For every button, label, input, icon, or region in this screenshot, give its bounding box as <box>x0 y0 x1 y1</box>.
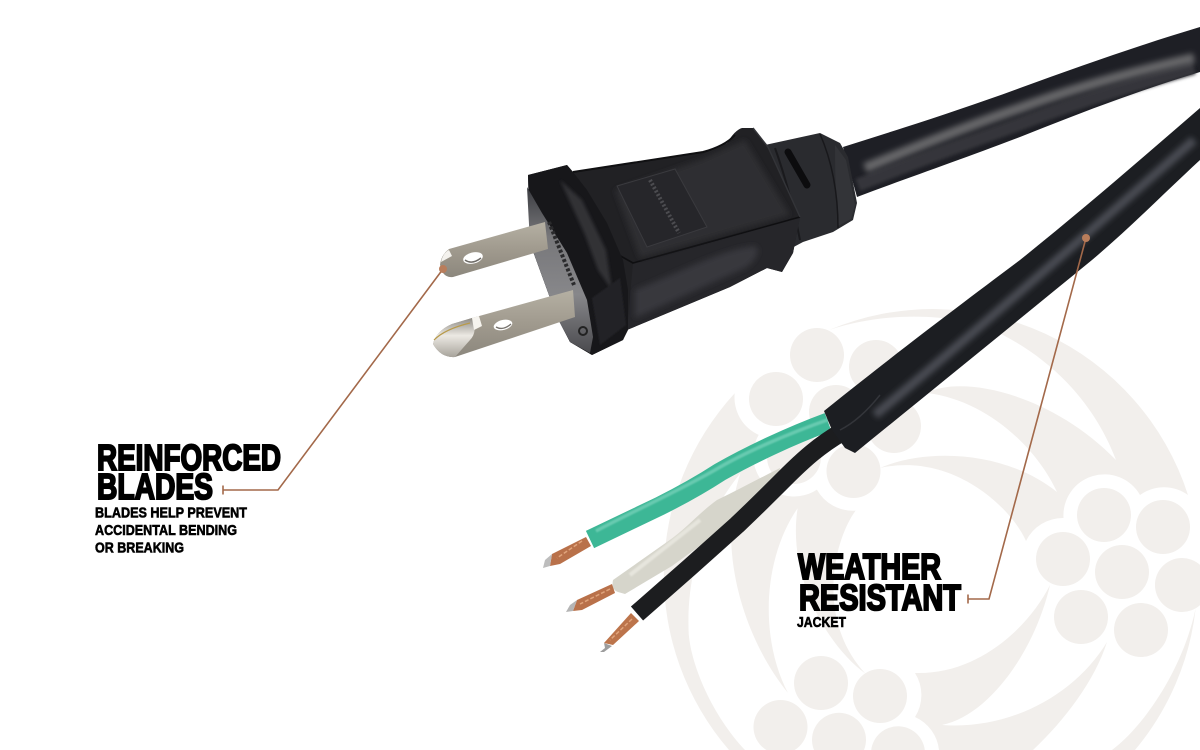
callout leader: weather resistant <box>968 234 1090 604</box>
plug <box>433 128 857 357</box>
plug front face <box>527 187 593 353</box>
swirl crescents <box>664 309 1196 750</box>
callout text: weather resistant <box>797 546 961 631</box>
callout leader: reinforced blades <box>223 265 447 494</box>
description: ACCIDENTAL BENDING <box>95 523 237 539</box>
wire: black <box>637 432 842 614</box>
copper conductors <box>543 537 639 652</box>
plug front flange <box>528 165 628 355</box>
circle cluster: right <box>1036 488 1200 657</box>
heading <box>798 546 961 618</box>
callout text: reinforced blades <box>95 437 281 556</box>
upper cable <box>843 27 1200 197</box>
description: BLADES HELP PREVENT <box>95 506 247 522</box>
description: JACKET <box>797 615 846 631</box>
lower blade <box>433 290 575 357</box>
heading: WEATHER <box>798 546 941 587</box>
black conductor <box>600 613 639 652</box>
heading: REINFORCED <box>97 437 281 478</box>
green conductor <box>543 537 591 568</box>
heading <box>97 437 281 507</box>
wire: white <box>613 468 780 594</box>
heading: BLADES <box>97 466 213 507</box>
circle cluster: bottom <box>754 656 925 750</box>
embossed label panel <box>617 169 707 247</box>
plug neck with slot <box>760 133 857 250</box>
circle cluster: top left <box>749 328 921 498</box>
upper blade <box>440 222 548 277</box>
white conductor <box>566 584 615 612</box>
jacket cable <box>824 108 1200 453</box>
plug body <box>528 128 800 355</box>
description: OR BREAKING <box>95 540 184 556</box>
wire: green <box>590 419 830 540</box>
description <box>95 506 247 556</box>
watermark: swirl logo <box>664 309 1200 750</box>
heading: RESISTANT <box>799 577 961 618</box>
